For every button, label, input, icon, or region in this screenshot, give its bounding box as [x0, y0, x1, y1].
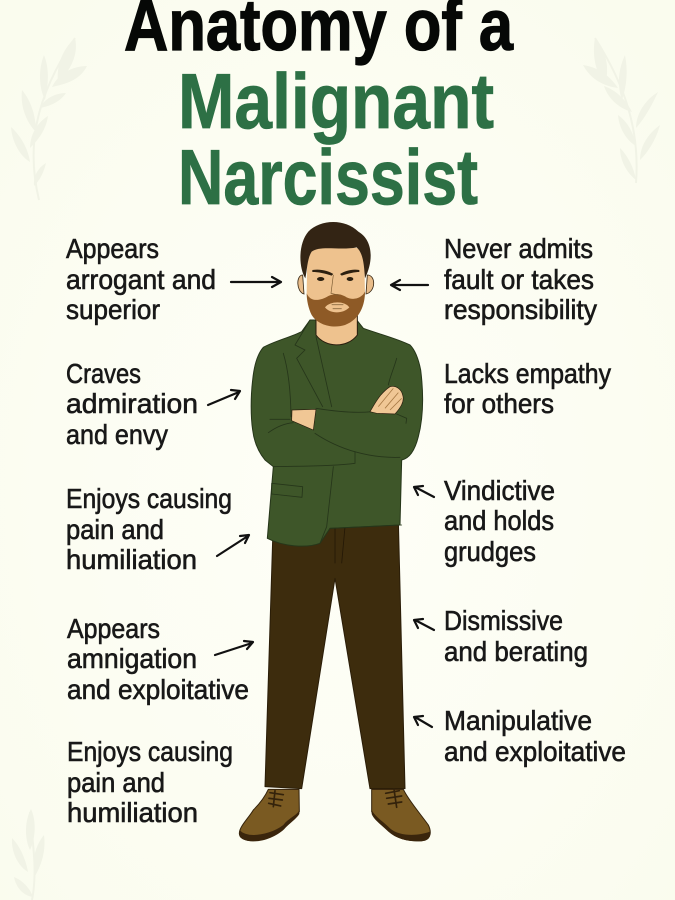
text block: enjoys causing pain and humiliation (lower)	[67, 736, 233, 828]
jacket line details	[268, 320, 407, 543]
figure: man with crossed arms	[239, 222, 430, 841]
neck	[316, 310, 357, 345]
eyebrows, eyes and nose	[312, 270, 359, 295]
text block: appears amnigation and exploitative: amnigation	[67, 643, 197, 674]
arrow: to jacket right	[414, 486, 434, 497]
text block: enjoys causing pain and humiliation (lower): pain and	[67, 767, 165, 798]
text block: dismissive and berating: and berating	[444, 636, 588, 667]
text block: dismissive and berating: Dismissive	[444, 605, 563, 636]
face	[307, 246, 365, 325]
hair	[300, 222, 371, 278]
icon: bottom-left laurel sprig	[12, 809, 45, 900]
text block: craves admiration and envy: and envy	[66, 419, 168, 450]
ears	[298, 275, 374, 294]
text block: manipulative and exploitative: Manipulative	[444, 705, 592, 736]
text block: appears amnigation and exploitative: Appears	[67, 613, 160, 644]
text block: appears amnigation and exploitative	[67, 613, 249, 705]
title line: Narcissist: Narcissist	[178, 133, 478, 221]
icon: right laurel sprig	[583, 38, 660, 183]
text block: never admits fault: responsibility	[444, 294, 597, 325]
arrow: to face from left	[231, 277, 281, 287]
text block: enjoys causing pain and humiliation	[66, 483, 232, 575]
arrow: to jacket hem	[217, 535, 249, 556]
icon: left boot	[239, 789, 299, 841]
text block: craves admiration and envy: Craves	[66, 358, 141, 389]
text block: vindictive and holds grudges	[444, 475, 555, 567]
title line: Malignant: Malignant	[178, 57, 494, 145]
arrow: to face from right	[391, 280, 428, 290]
arrow: to right shin	[414, 716, 432, 727]
text block: lacks empathy: for others	[444, 388, 554, 419]
jacket and torso	[251, 320, 423, 546]
text block: appears arrogant and superior	[66, 233, 216, 325]
hand on arm	[370, 386, 403, 414]
text block: never admits fault: fault or takes	[444, 264, 594, 295]
arrow: to left leg	[215, 641, 253, 655]
text block: vindictive and holds grudges: grudges	[444, 536, 536, 567]
icon: left laurel sprig	[11, 38, 87, 200]
text block: vindictive and holds grudges: Vindictive	[444, 475, 555, 506]
text block: manipulative and exploitative: and exploitative	[444, 736, 626, 767]
text block: manipulative and exploitative	[444, 705, 626, 767]
text block: craves admiration and envy: admiration	[66, 388, 198, 419]
trousers	[265, 520, 405, 789]
text block: lacks empathy: Lacks empathy	[444, 358, 611, 389]
text block: appears amnigation and exploitative: and exploitative	[67, 674, 249, 705]
text block: dismissive and berating	[444, 605, 588, 667]
text block: craves admiration and envy	[66, 358, 198, 450]
text block: vindictive and holds grudges: and holds	[444, 505, 554, 536]
text block: lacks empathy	[444, 358, 611, 419]
arrow: to left arm	[208, 390, 240, 405]
text block: enjoys causing pain and humiliation (lower): Enjoys causing	[67, 736, 233, 767]
left forearm cuff and skin	[292, 409, 316, 430]
icon: right boot	[372, 789, 430, 841]
text block: appears arrogant and superior: superior	[66, 294, 160, 325]
text block: never admits fault	[444, 233, 597, 325]
text block: enjoys causing pain and humiliation: humiliation	[66, 544, 197, 575]
text block: enjoys causing pain and humiliation: Enjoys causing	[66, 483, 232, 514]
arrows	[208, 277, 434, 727]
beard	[307, 292, 365, 326]
text block: appears arrogant and superior: arrogant and	[66, 264, 216, 295]
text block: enjoys causing pain and humiliation: pain and	[66, 514, 164, 545]
text block: never admits fault: Never admits	[444, 233, 593, 264]
arrow: to right thigh	[414, 619, 434, 630]
text block: appears arrogant and superior: Appears	[66, 233, 159, 264]
title	[124, 0, 514, 221]
text block: enjoys causing pain and humiliation (lower): humiliation	[67, 797, 198, 828]
